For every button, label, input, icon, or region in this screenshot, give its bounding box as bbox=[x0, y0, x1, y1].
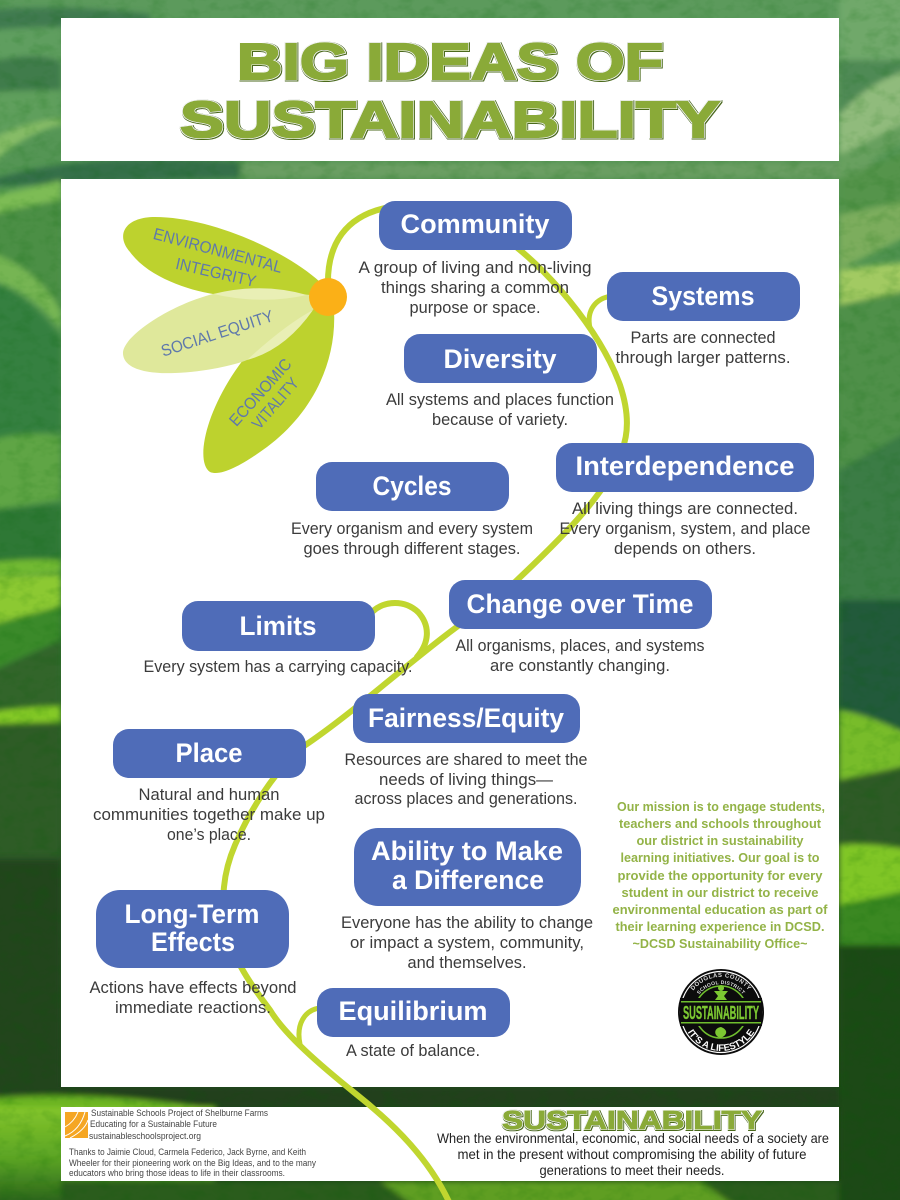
logo: DCSD sustainability badge bbox=[678, 969, 764, 1055]
idea: systems: Systems bbox=[652, 281, 754, 311]
title: BIG IDEAS OF bbox=[237, 33, 663, 90]
logo: DCSD sustainability badge: DOUGLAS COUNTY bbox=[690, 972, 752, 990]
logo: DCSD sustainability badge: SCHOOL DISTRICT bbox=[697, 980, 746, 994]
idea: long-term effects bbox=[90, 890, 296, 1017]
idea: equilibrium: Equilibrium bbox=[338, 996, 488, 1026]
footer: shelburne farms credits: Educating for a Sustainable Future bbox=[90, 1119, 217, 1129]
flower centre bbox=[309, 278, 347, 316]
idea: limits: Limits bbox=[240, 611, 316, 641]
footer: shelburne farms credits: Wheeler for their pioneering work on the Big Ideas, and to the many bbox=[69, 1158, 316, 1168]
idea: ability to make a difference: Ability to Make bbox=[371, 836, 563, 866]
idea: diversity: because of variety. bbox=[432, 410, 568, 429]
flower: three pillars bbox=[123, 217, 334, 473]
petal: environmental integrity bbox=[123, 217, 320, 297]
mission statement bbox=[612, 799, 828, 951]
label: environmental integrity: ENVIRONMENTAL bbox=[151, 225, 284, 277]
idea: community: Community bbox=[400, 209, 550, 239]
label: environmental integrity: INTEGRITY bbox=[174, 255, 258, 291]
idea: place: Natural and human bbox=[138, 785, 280, 804]
idea: limits bbox=[144, 601, 412, 676]
idea: change over time: are constantly changing. bbox=[490, 656, 670, 675]
idea: cycles bbox=[291, 462, 533, 558]
idea: equilibrium: A state of balance. bbox=[346, 1041, 480, 1060]
panel: title bbox=[61, 18, 839, 161]
idea: ability to make a difference bbox=[341, 828, 593, 972]
footer: shelburne farms credits bbox=[65, 1108, 316, 1178]
idea: ability to make a difference: or impact a system, community, bbox=[350, 933, 584, 952]
idea: interdependence: Every organism, system, and place bbox=[560, 519, 810, 538]
mission statement: environmental education as part of bbox=[612, 902, 828, 917]
mission statement: student in our district to receive bbox=[622, 885, 818, 900]
mission statement: their learning experience in DCSD. bbox=[616, 919, 824, 934]
idea: fairness/equity: needs of living things— bbox=[379, 770, 553, 789]
idea: long-term effects: immediate reactions. bbox=[115, 998, 271, 1017]
idea: long-term effects: Effects bbox=[151, 927, 235, 957]
idea: fairness/equity bbox=[344, 694, 588, 808]
idea: place: Place bbox=[176, 738, 242, 768]
footer: sustainability definition: SUSTAINABILITY bbox=[502, 1105, 762, 1135]
footer: sustainability definition bbox=[437, 1105, 829, 1178]
idea: cycles: Every organism and every system bbox=[291, 519, 533, 538]
idea: long-term effects: Long-Term bbox=[124, 899, 260, 929]
idea: ability to make a difference: Everyone has the ability to change bbox=[341, 913, 593, 932]
mission statement: teachers and schools throughout bbox=[619, 816, 822, 831]
label: economic vitality: ECONOMIC bbox=[226, 355, 296, 430]
title line 2: SUSTAINABILITY bbox=[180, 91, 720, 148]
idea: diversity: All systems and places function bbox=[386, 390, 614, 409]
footer: shelburne farms credits: Thanks to Jaimie Cloud, Carmela Federico, Jack Byrne, and Keith bbox=[69, 1147, 306, 1157]
idea: cycles: goes through different stages. bbox=[304, 539, 520, 558]
footer: shelburne farms credits: educators who bring those ideas to life in their classrooms. bbox=[69, 1168, 285, 1178]
logo: DCSD sustainability badge: SUSTAINABILITY bbox=[683, 1003, 759, 1023]
footer: sustainability definition: When the environmental, economic, and social needs of a society are bbox=[437, 1130, 829, 1146]
idea: change over time: Change over Time bbox=[466, 589, 694, 619]
idea: place: communities together make up bbox=[93, 805, 325, 824]
mission statement: ~DCSD Sustainability Office~ bbox=[632, 936, 808, 951]
idea: interdependence: All living things are connected. bbox=[572, 499, 798, 518]
idea: cycles: Cycles bbox=[372, 471, 452, 501]
logo: DCSD sustainability badge: IT’S A LIFESTYLE bbox=[688, 1028, 754, 1051]
idea: long-term effects: Actions have effects beyond bbox=[90, 978, 296, 997]
idea: community: things sharing a common bbox=[381, 278, 569, 297]
idea: fairness/equity: across places and generations. bbox=[354, 789, 578, 808]
idea: diversity: Diversity bbox=[444, 344, 556, 374]
petal overlap highlights bbox=[213, 288, 313, 360]
idea: fairness/equity: Resources are shared to meet the bbox=[344, 750, 588, 769]
footer: shelburne farms credits: sustainableschoolsproject.org bbox=[89, 1131, 201, 1141]
idea: community: A group of living and non-living bbox=[358, 258, 592, 277]
idea: fairness/equity: Fairness/Equity bbox=[368, 703, 564, 733]
idea: systems: Parts are connected bbox=[630, 328, 776, 347]
idea: community: purpose or space. bbox=[410, 298, 540, 317]
mission statement: provide the opportunity for every bbox=[618, 868, 823, 883]
idea: place: one’s place. bbox=[167, 825, 251, 844]
petal: economic vitality bbox=[203, 303, 334, 473]
idea: systems bbox=[607, 272, 800, 367]
idea: ability to make a difference: and themselves. bbox=[408, 953, 526, 972]
label: economic vitality: VITALITY bbox=[249, 374, 303, 433]
idea: interdependence bbox=[556, 443, 814, 558]
panel: footer bbox=[61, 1107, 839, 1181]
idea: community bbox=[358, 201, 592, 317]
idea: ability to make a difference: a Difference bbox=[392, 865, 544, 895]
label: social equity: SOCIAL EQUITY bbox=[159, 307, 276, 361]
idea: place bbox=[93, 729, 325, 844]
idea: limits: Every system has a carrying capacity. bbox=[144, 657, 412, 676]
stem: winding main vine bbox=[223, 207, 627, 1200]
idea: systems: through larger patterns. bbox=[616, 348, 790, 367]
mission statement: our district in sustainability bbox=[636, 833, 804, 848]
icon: orange logo bbox=[65, 1112, 88, 1138]
idea: change over time bbox=[449, 580, 712, 675]
idea: interdependence: depends on others. bbox=[614, 539, 756, 558]
mission statement: Our mission is to engage students, bbox=[617, 799, 825, 814]
panel: big ideas bbox=[61, 179, 839, 1087]
idea: diversity bbox=[386, 334, 614, 429]
footer: sustainability definition: met in the present without compromising the ability of future bbox=[458, 1146, 807, 1162]
petal: social equity bbox=[123, 293, 315, 373]
mission statement: learning initiatives. Our goal is to bbox=[620, 850, 820, 865]
footer: shelburne farms credits: Sustainable Schools Project of Shelburne Farms bbox=[91, 1108, 268, 1118]
idea: change over time: All organisms, places, and systems bbox=[456, 636, 704, 655]
footer: sustainability definition: generations to meet their needs. bbox=[540, 1162, 724, 1178]
idea: interdependence: Interdependence bbox=[576, 451, 794, 481]
idea: equilibrium bbox=[317, 988, 510, 1060]
